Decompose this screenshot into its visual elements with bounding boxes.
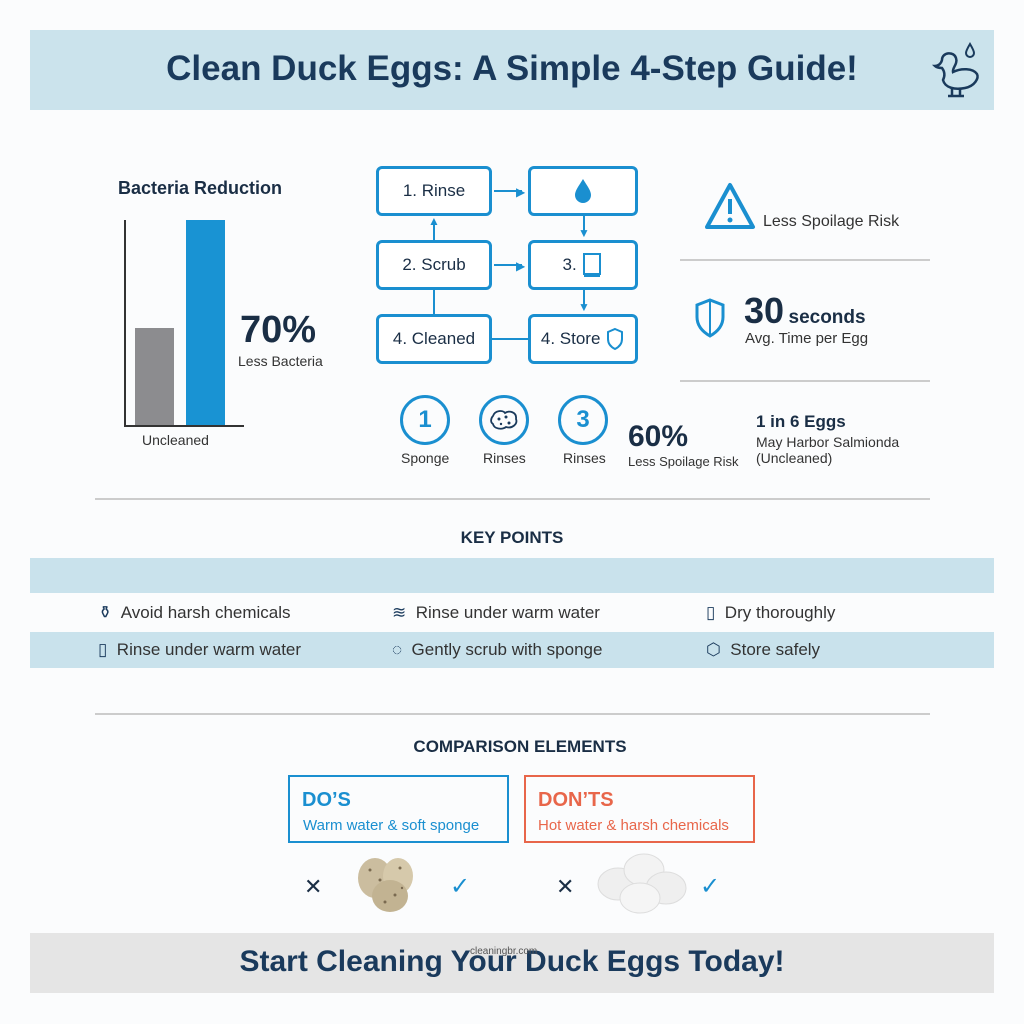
key point items: ⚱ Avoid harsh chemicals: [98, 603, 291, 622]
callout: 30 seconds: 30 seconds: [744, 290, 866, 331]
footer banner: [30, 933, 994, 993]
title banner: [30, 30, 994, 110]
step: cleaned: [376, 314, 492, 364]
stat 1 in 6: [756, 412, 900, 466]
key points table: ◌ Gently scrub with sponge: [392, 640, 602, 659]
icon row: [400, 395, 608, 466]
step: cleaned: 4. Cleaned: [393, 329, 475, 348]
bar: cleaned: [186, 220, 225, 425]
panel: do's: [288, 775, 509, 843]
key points table: [30, 558, 994, 668]
step: water: [528, 166, 638, 216]
eggs: speckled: ✕: [304, 874, 322, 899]
eggs: speckled: [304, 858, 470, 912]
stat 1 in 6: (Uncleaned): [756, 450, 832, 466]
key points table: ▯ Rinse under warm water: [98, 640, 301, 659]
panel: don'ts: [524, 775, 755, 843]
callout: spoilage risk: [705, 182, 900, 230]
callout: spoilage risk: Less Spoilage Risk: [763, 213, 899, 230]
stat 60%: 60%: [628, 420, 688, 453]
icon: duck: [932, 42, 979, 98]
stat 1 in 6: 1 in 6 Eggs: [756, 412, 846, 431]
eggs: white: ✕: [556, 874, 574, 899]
callout: 30 seconds: [696, 290, 868, 347]
flowchart: [376, 166, 638, 364]
step: store: 4. Store: [541, 329, 600, 348]
flowchart: ▲: [428, 214, 440, 228]
eggs: speckled: ✓: [450, 873, 470, 900]
panel: don'ts: DON’TS: [538, 789, 614, 811]
key points table: ≋ Rinse under warm water: [392, 603, 600, 622]
icon: sponge rinses: [479, 395, 529, 445]
footer banner: cleaningbr.com: [470, 946, 537, 957]
step: scrub: [376, 240, 492, 290]
axis label: Uncleaned: [142, 432, 209, 448]
icon: 1 sponge: 1: [418, 406, 432, 433]
flowchart: ▼: [578, 226, 590, 240]
icon: warning: [705, 182, 756, 229]
icon row: Rinses: [563, 450, 606, 466]
bar: uncleaned: [135, 328, 174, 425]
step: 3: [528, 240, 638, 290]
step: 3: 3.: [563, 255, 577, 274]
icon: shield: [696, 298, 724, 338]
stat 60%: Less Spoilage Risk: [628, 454, 739, 469]
icon: 3 rinses: 3: [576, 406, 590, 433]
bar chart: bacteria reduction: [118, 178, 323, 448]
icon: 3 rinses: [558, 395, 608, 445]
footer banner: Start Cleaning Your Duck Eggs Today!: [239, 945, 785, 978]
step: store: [528, 314, 638, 364]
icon row: Rinses: [483, 450, 526, 466]
icon: 1 sponge: [400, 395, 450, 445]
flowchart: ▶: [516, 185, 525, 199]
panel: do's: Warm water & soft sponge: [303, 817, 479, 834]
heading: comparison: COMPARISON ELEMENTS: [413, 737, 627, 756]
key points table: ⬡ Store safely: [706, 640, 820, 659]
heading: key points: KEY POINTS: [461, 528, 563, 547]
panel: don'ts: Hot water & harsh chemicals: [538, 817, 729, 834]
chart title: Bacteria Reduction: [118, 178, 282, 198]
key points table: ▯ Dry thoroughly: [706, 603, 835, 622]
flowchart: ▶: [516, 259, 525, 273]
callout: 30 seconds: Avg. Time per Egg: [745, 330, 868, 347]
step: scrub: 2. Scrub: [402, 255, 466, 274]
eggs: white: ✓: [700, 873, 720, 900]
stat 60%: [628, 420, 739, 469]
bar chart: bacteria reduction: Less Bacteria: [238, 353, 323, 369]
stat 70%: 70%: [240, 309, 316, 351]
step: rinse: 1. Rinse: [403, 181, 465, 200]
stat 1 in 6: May Harbor Salmionda: [756, 434, 899, 450]
icon row: Sponge: [401, 450, 449, 466]
step: rinse: [376, 166, 492, 216]
eggs: white: [556, 854, 720, 914]
panel: do's: DO’S: [302, 789, 351, 811]
flowchart: ▼: [578, 300, 590, 314]
title: Clean Duck Eggs: A Simple 4-Step Guide!: [166, 49, 858, 88]
